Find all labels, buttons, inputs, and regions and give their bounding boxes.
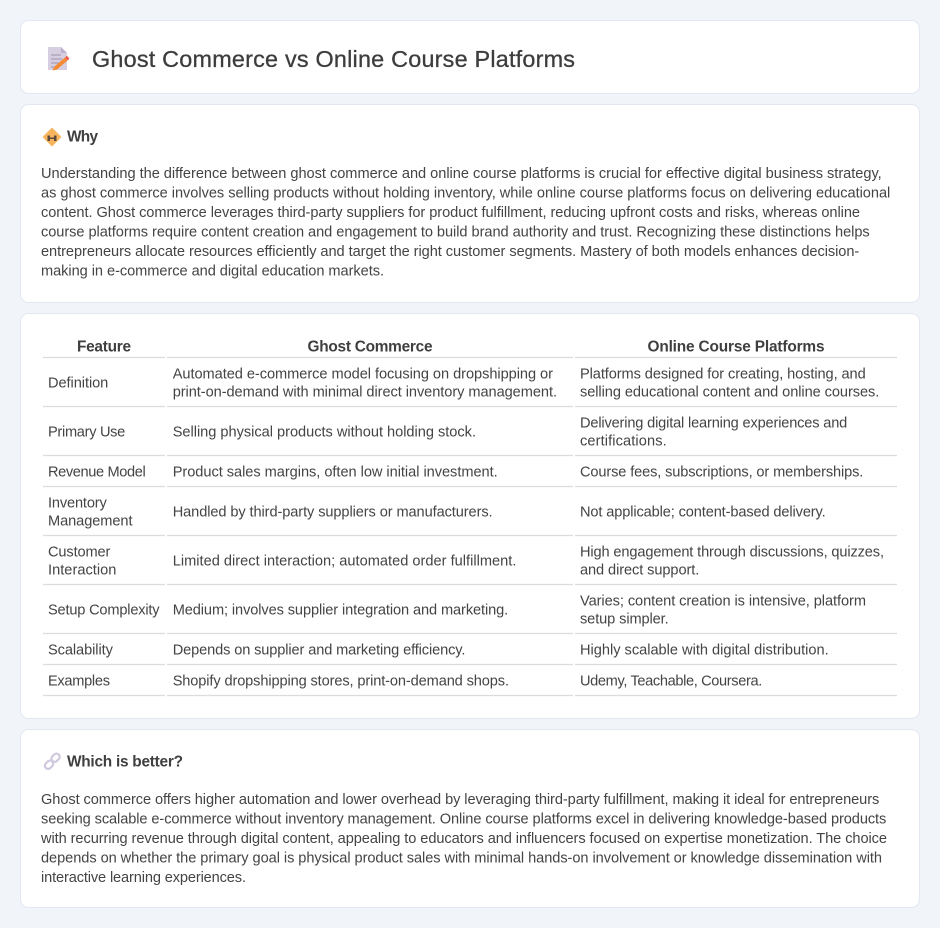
row: customer interaction: Interaction — [48, 562, 116, 578]
row: customer interaction: and direct support. — [580, 562, 699, 578]
row: setup complexity: Setup Complexity — [48, 602, 160, 618]
row: customer interaction — [43, 544, 897, 584]
icon: document with pencil — [48, 47, 70, 70]
row: inventory management — [43, 496, 897, 536]
text block: why paragraph: as ghost commerce involves selling products without holding inventory, while online course platforms focus on delivering educational — [41, 186, 890, 202]
text block: which is better paragraph: depends on whether the primary goal is physical product sales with minimal hands-on involvement or knowledge dissemination with — [41, 850, 882, 866]
row: inventory management: Not applicable; content-based delivery. — [580, 504, 826, 520]
row: setup complexity: setup simpler. — [580, 612, 669, 628]
row: definition — [43, 366, 897, 406]
heading: which is better: Which is better? — [67, 754, 183, 770]
row: examples: Shopify dropshipping stores, print-on-demand shops. — [173, 674, 509, 690]
title: Ghost Commerce vs Online Course Platforms — [92, 46, 575, 72]
text block: why paragraph: course platforms require content creation and engagement to build brand authority and trust. Recognizing these distinctions helps — [41, 224, 870, 240]
text block: why paragraph: Understanding the difference between ghost commerce and online course platforms is crucial for effective digital business strategy, — [41, 166, 882, 182]
row: inventory management: Handled by third-party suppliers or manufacturers. — [173, 504, 493, 520]
row: revenue model: Product sales margins, often low initial investment. — [173, 464, 498, 480]
row: examples: Udemy, Teachable, Coursera. — [580, 674, 762, 690]
table header: Ghost Commerce — [308, 339, 433, 356]
row: primary use: Selling physical products without holding stock. — [173, 424, 476, 440]
row: examples: Examples — [48, 674, 110, 690]
text block: which is better paragraph — [40, 792, 887, 886]
panel: why — [20, 104, 920, 302]
row: primary use: Delivering digital learning experiences and — [580, 416, 847, 432]
row: revenue model: Revenue Model — [48, 464, 146, 480]
row: customer interaction: High engagement through discussions, quizzes, — [580, 544, 884, 560]
text block: why paragraph: making in e-commerce and digital education markets. — [41, 264, 384, 280]
table header — [43, 339, 897, 358]
panel: title card — [20, 20, 920, 94]
text block: why paragraph — [41, 166, 890, 280]
row: revenue model: Course fees, subscriptions, or memberships. — [580, 464, 863, 480]
row: definition: Definition — [48, 376, 108, 392]
row: setup complexity — [43, 594, 897, 634]
row: inventory management: Management — [48, 514, 132, 530]
text block: why paragraph: entrepreneurs allocate resources efficiently and target the right customer segments. Mastery of both models enhances decision- — [41, 244, 859, 260]
row: customer interaction: Limited direct interaction; automated order fulfillment. — [173, 554, 516, 570]
row: setup complexity: Varies; content creation is intensive, platform — [580, 594, 866, 610]
row: customer interaction: Customer — [48, 544, 111, 560]
row: inventory management: Inventory — [48, 496, 108, 512]
row: revenue model — [43, 464, 897, 486]
row: setup complexity: Medium; involves supplier integration and marketing. — [173, 602, 508, 618]
table header: Feature — [77, 339, 131, 356]
text block: why paragraph: content. Ghost commerce leverages third-party suppliers for product fulfillment, reducing upfront costs and risks, whereas online — [41, 205, 860, 221]
text block: which is better paragraph: interactive learning experiences. — [41, 870, 246, 886]
row: primary use: certifications. — [580, 434, 667, 450]
text block: which is better paragraph: Ghost commerce offers higher automation and lower overhead by leveraging third-party fulfillment, making it ideal for entrepreneurs — [41, 792, 879, 808]
row: primary use — [43, 416, 897, 456]
row: definition: Platforms designed for creating, hosting, and — [580, 366, 866, 382]
panel: which is better — [20, 730, 920, 908]
row: examples — [43, 674, 897, 696]
row: definition: selling educational content and online courses. — [580, 384, 879, 400]
row: scalability: Highly scalable with digital distribution. — [580, 642, 829, 658]
table header: Online Course Platforms — [648, 339, 824, 356]
text block: which is better paragraph: with recurring revenue through digital content, appealing to educators and influencers focused on expertise monetization. The choice — [40, 831, 887, 847]
row: definition: Automated e-commerce model focusing on dropshipping or — [173, 366, 553, 382]
row: scalability: Depends on supplier and marketing efficiency. — [173, 642, 465, 658]
row: scalability — [43, 642, 897, 664]
icon: chain link — [44, 752, 61, 770]
heading: why: Why — [67, 128, 98, 146]
panel: comparison table — [20, 314, 920, 718]
icon: orange diamond sign — [44, 128, 60, 146]
row: scalability: Scalability — [48, 642, 114, 658]
text block: which is better paragraph: seeking scalable e-commerce without inventory management. Online course platforms excel in delivering knowledge-based products — [41, 812, 886, 828]
row: primary use: Primary Use — [48, 424, 125, 440]
row: definition: print-on-demand with minimal direct inventory management. — [173, 384, 557, 400]
